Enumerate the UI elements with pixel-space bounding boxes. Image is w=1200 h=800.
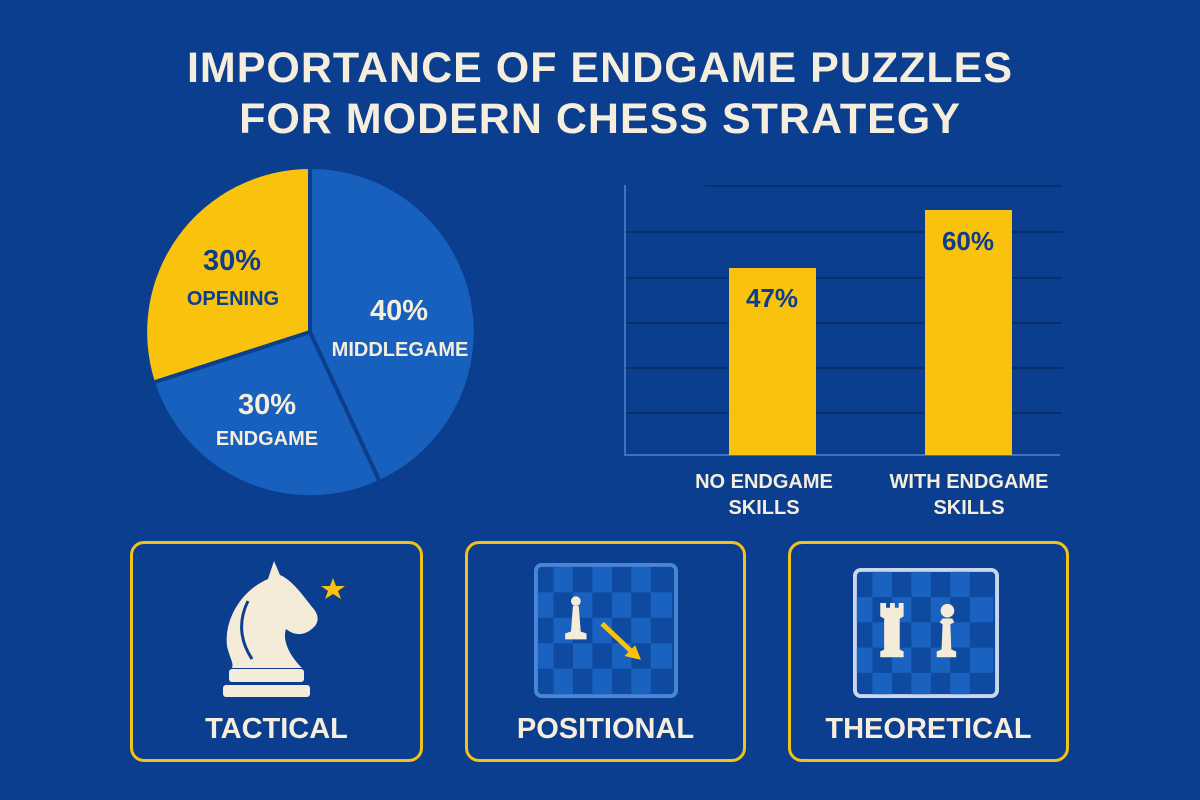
bar chart: 60%: [942, 226, 994, 256]
card: theoretical: [788, 541, 1069, 762]
pie chart: 40%: [370, 295, 428, 327]
label: TACTICAL: [205, 713, 348, 745]
title: FOR MODERN CHESS STRATEGY: [239, 95, 961, 143]
pie chart: MIDDLEGAME: [332, 339, 468, 361]
pie chart: ENDGAME: [216, 428, 318, 450]
pie chart: [147, 169, 1062, 519]
bar chart: [625, 185, 1062, 519]
card: tactical: [130, 541, 423, 762]
label: POSITIONAL: [517, 713, 694, 745]
bar chart: NO ENDGAME: [695, 471, 833, 493]
title: [187, 44, 1013, 143]
card: positional: [465, 541, 746, 762]
icon: board with rook and pawn: [853, 568, 999, 698]
icon: knight with star: [223, 561, 345, 697]
label: THEORETICAL: [825, 713, 1032, 745]
title: IMPORTANCE OF ENDGAME PUZZLES: [187, 44, 1013, 92]
pie chart: 30%: [238, 389, 296, 421]
bar chart: WITH ENDGAME: [890, 471, 1048, 493]
pie chart: 30%: [203, 245, 261, 277]
bar chart: SKILLS: [728, 497, 800, 519]
pie chart: OPENING: [187, 288, 279, 310]
bar chart: 47%: [746, 283, 798, 313]
bar chart: SKILLS: [933, 497, 1005, 519]
icon: board with pawn and arrow: [534, 563, 678, 698]
